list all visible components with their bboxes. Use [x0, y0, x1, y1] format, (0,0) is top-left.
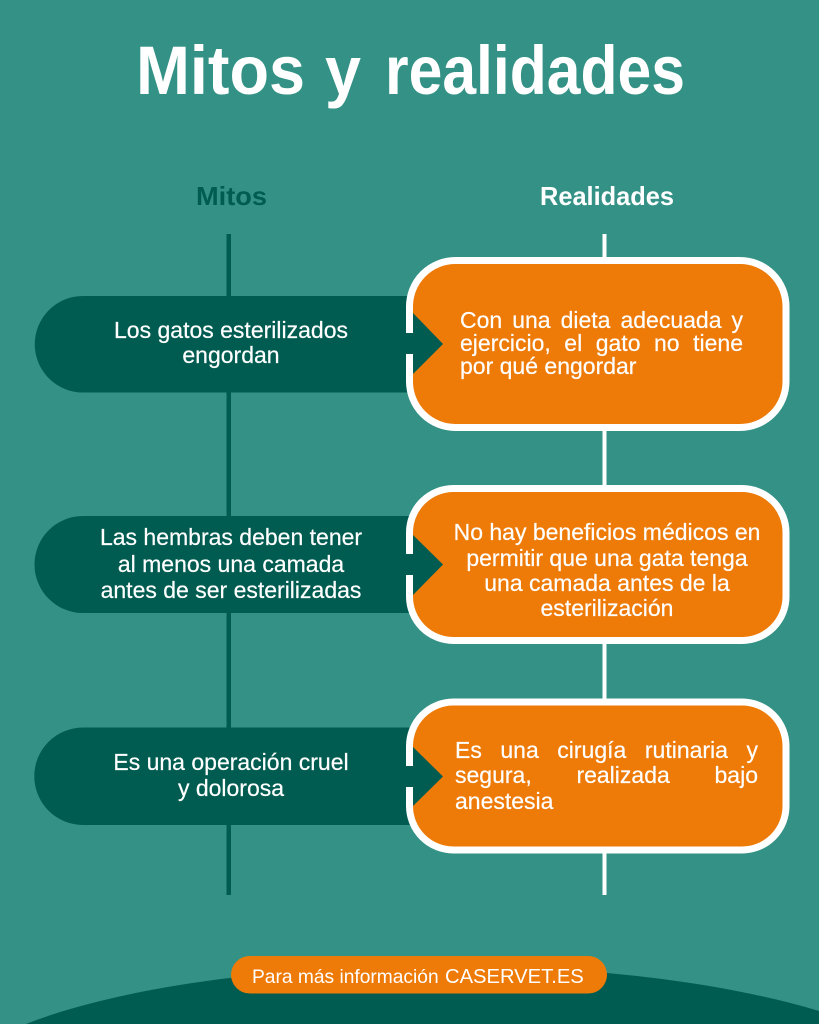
heading: mitos: Mitos	[196, 181, 267, 211]
text: realidad 1: por qué engordar	[460, 353, 636, 379]
footer text: Para más información	[252, 967, 439, 988]
text: realidad 3: segura, realizada bajo	[455, 762, 758, 788]
text: mito 2	[100, 524, 362, 603]
text: realidad 3: anestesia	[455, 788, 553, 814]
title	[136, 32, 685, 109]
arrow: row 3	[405, 747, 443, 806]
text: realidad 2	[454, 519, 760, 621]
arrow: row 2	[405, 535, 443, 595]
text: realidad 2: esterilización	[541, 595, 673, 621]
text: realidad 2: una camada antes de la	[484, 570, 730, 596]
text: mito 1	[114, 317, 348, 368]
arrow: row 1	[405, 313, 443, 374]
text: realidad 1	[460, 307, 744, 380]
pill: mito 2	[34, 516, 410, 613]
text: mito 3	[113, 749, 349, 802]
title: realidades	[385, 32, 685, 109]
pill: mito 3	[34, 728, 410, 825]
title: Mitos	[136, 32, 305, 109]
heading: realidades: Realidades	[540, 181, 674, 211]
text: realidad 1: ejercicio, el gato no tiene	[460, 330, 743, 356]
pill: mito 1	[35, 296, 410, 392]
text: mito 1: Los gatos esterilizados	[114, 317, 348, 343]
text: mito 3: Es una operación cruel	[113, 749, 349, 775]
text: mito 2: antes de ser esterilizadas	[101, 577, 361, 603]
bottom dark arc	[26, 965, 819, 1024]
text: realidad 1: Con una dieta adecuada y	[460, 307, 743, 333]
text: mito 2: al menos una camada	[118, 551, 344, 577]
timeline: realidades	[602, 234, 606, 895]
card: realidad 1	[410, 260, 786, 428]
card: realidad 2	[410, 488, 786, 640]
footer pill	[231, 956, 607, 994]
text: mito 2: Las hembras deben tener	[100, 524, 362, 550]
text: realidad 3: Es una cirugía rutinaria y	[455, 737, 758, 763]
timeline: mitos	[226, 234, 231, 895]
title: y	[325, 32, 361, 109]
text: realidad 3	[455, 737, 758, 814]
text: mito 1: engordan	[182, 342, 280, 368]
footer text: CASERVET.ES	[445, 966, 584, 988]
text: realidad 2: No hay beneficios médicos en	[454, 519, 760, 545]
card: realidad 3	[410, 702, 786, 850]
text: mito 3: y dolorosa	[178, 775, 284, 801]
text: realidad 2: permitir que una gata tenga	[466, 545, 748, 571]
